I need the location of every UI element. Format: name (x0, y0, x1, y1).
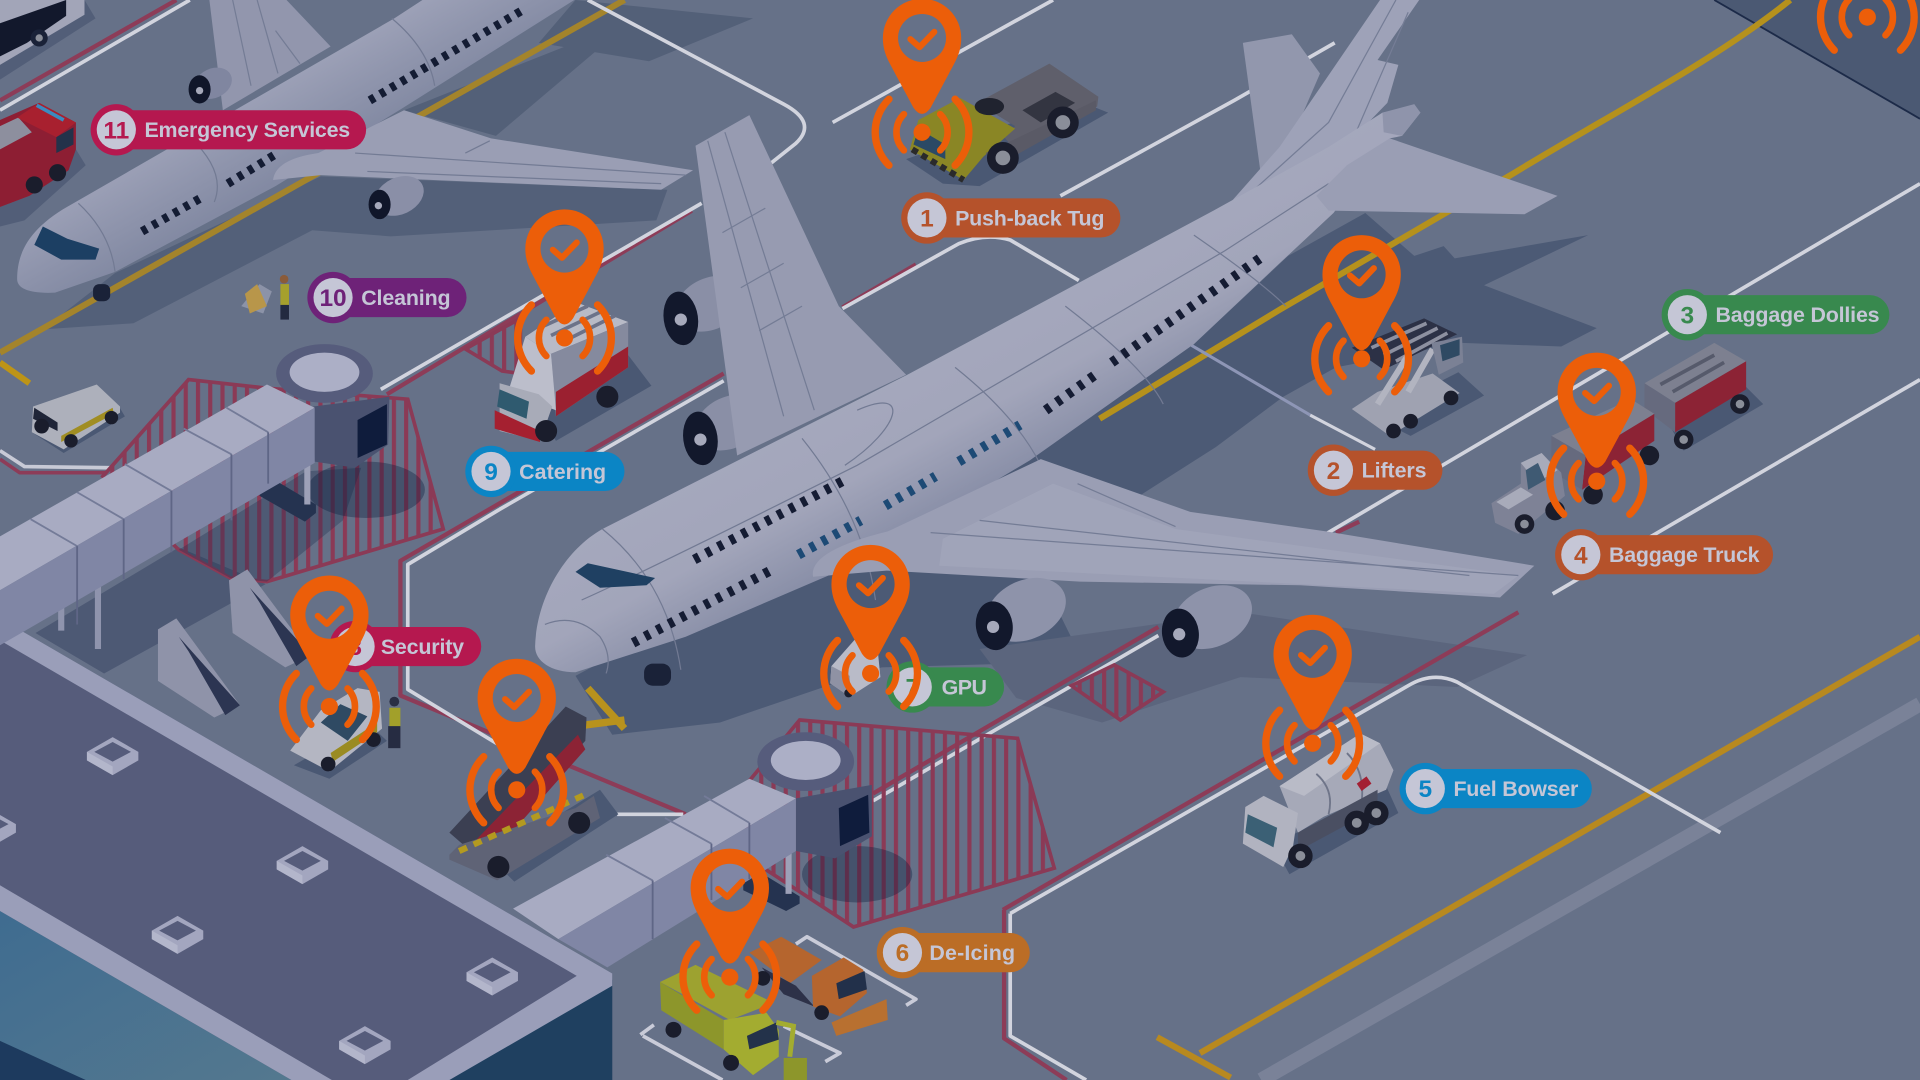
vehicle: ground power unit (830, 636, 880, 697)
label: 5 Fuel Bowser: 5 (1419, 776, 1432, 803)
vehicle: bus (0, 0, 96, 80)
vehicle: jeep left (32, 384, 125, 453)
label: 1 Push-back Tug: Push-back Tug (955, 206, 1104, 230)
fuselage panel lines (545, 184, 1329, 673)
label: 2 Lifters: Lifters (1362, 459, 1427, 483)
label: 2 Lifters: 2 (1327, 458, 1340, 485)
label: 8 Security: 8 (348, 634, 362, 661)
pin: lifters (1315, 235, 1408, 392)
airstairs (158, 569, 311, 718)
pin: GPU (824, 545, 917, 707)
label: 6 De-Icing: De-Icing (929, 941, 1015, 965)
main aircraft (535, 0, 1558, 686)
label: 7 GPU (887, 661, 1004, 713)
vehicle: passenger stairs truck (449, 707, 618, 882)
cabin windows (633, 258, 1260, 643)
cockpit windows (576, 563, 655, 588)
vehicle: orange de-icing truck (749, 937, 888, 1036)
label: 3 Baggage Dollies: 3 (1681, 302, 1694, 329)
tail cone (1382, 104, 1420, 136)
ground shadows (36, 0, 1920, 735)
nose gear (644, 664, 671, 686)
tail (1215, 0, 1419, 224)
near engines (973, 566, 1262, 661)
pin: fuel bowser (1266, 615, 1360, 776)
label: 8 Security: Security (381, 635, 464, 659)
vehicle: fuel bowser (1243, 733, 1398, 874)
vehicle: fire engine (0, 103, 86, 227)
signal: top right (1820, 0, 1914, 50)
label: 11 Emergency Services: 11 (103, 117, 129, 144)
label: 8 Security (329, 621, 481, 672)
label: 7 GPU: 7 (905, 675, 919, 702)
label: 11 Emergency Services (91, 104, 366, 156)
label: 4 Baggage Truck: 4 (1574, 542, 1588, 569)
label: 6 De-Icing (877, 927, 1030, 978)
pin: baggage truck (1550, 353, 1644, 514)
vehicle: catering truck (495, 302, 651, 442)
fuselage (535, 107, 1420, 672)
label: 1 Push-back Tug (901, 192, 1120, 244)
pin: push-back tug (875, 0, 969, 165)
label: 9 Catering: Catering (519, 460, 606, 484)
jet bridge lower (513, 732, 912, 967)
label: 6 De-Icing: 6 (896, 940, 909, 967)
label: 10 Cleaning: Cleaning (361, 286, 451, 310)
pin: passenger stairs (470, 659, 564, 823)
small aircraft (17, 0, 693, 301)
label: 1 Push-back Tug: 1 (920, 206, 934, 233)
vehicle: baggage truck (1491, 453, 1565, 534)
label: 5 Fuel Bowser: Fuel Bowser (1453, 777, 1578, 801)
label: 10 Cleaning (307, 272, 467, 323)
label: 2 Lifters (1308, 444, 1442, 496)
pin: security (283, 576, 376, 740)
vehicle: baggage dollies (1551, 343, 1763, 504)
label: 7 GPU: GPU (942, 675, 987, 699)
vehicle: security car and guard (290, 688, 400, 779)
label: 4 Baggage Truck: Baggage Truck (1609, 543, 1760, 567)
vehicle: lifter (1352, 318, 1484, 438)
cleaning crew (241, 275, 289, 320)
roof skylights (0, 737, 518, 1064)
label: 3 Baggage Dollies: Baggage Dollies (1716, 303, 1880, 327)
label: 9 Catering: 9 (484, 459, 498, 486)
label: 4 Baggage Truck (1555, 529, 1773, 580)
near wing (813, 459, 1534, 598)
red hatched zones (103, 318, 1163, 927)
terminal building (0, 618, 612, 1080)
label: 5 Fuel Bowser (1400, 763, 1592, 814)
label: 3 Baggage Dollies (1662, 289, 1889, 340)
vehicle: push-back tug (906, 64, 1108, 186)
pin: de-icing (683, 849, 777, 1010)
jet bridge upper (0, 344, 425, 649)
vehicle: green de-icing truck (660, 965, 807, 1080)
label: 9 Catering (465, 446, 624, 497)
pin: catering (518, 209, 611, 371)
label: 10 Cleaning: 10 (319, 285, 347, 312)
label: 11 Emergency Services: Emergency Services (144, 118, 350, 142)
far wing and engines (660, 115, 906, 467)
stabilizer near (1316, 138, 1558, 214)
